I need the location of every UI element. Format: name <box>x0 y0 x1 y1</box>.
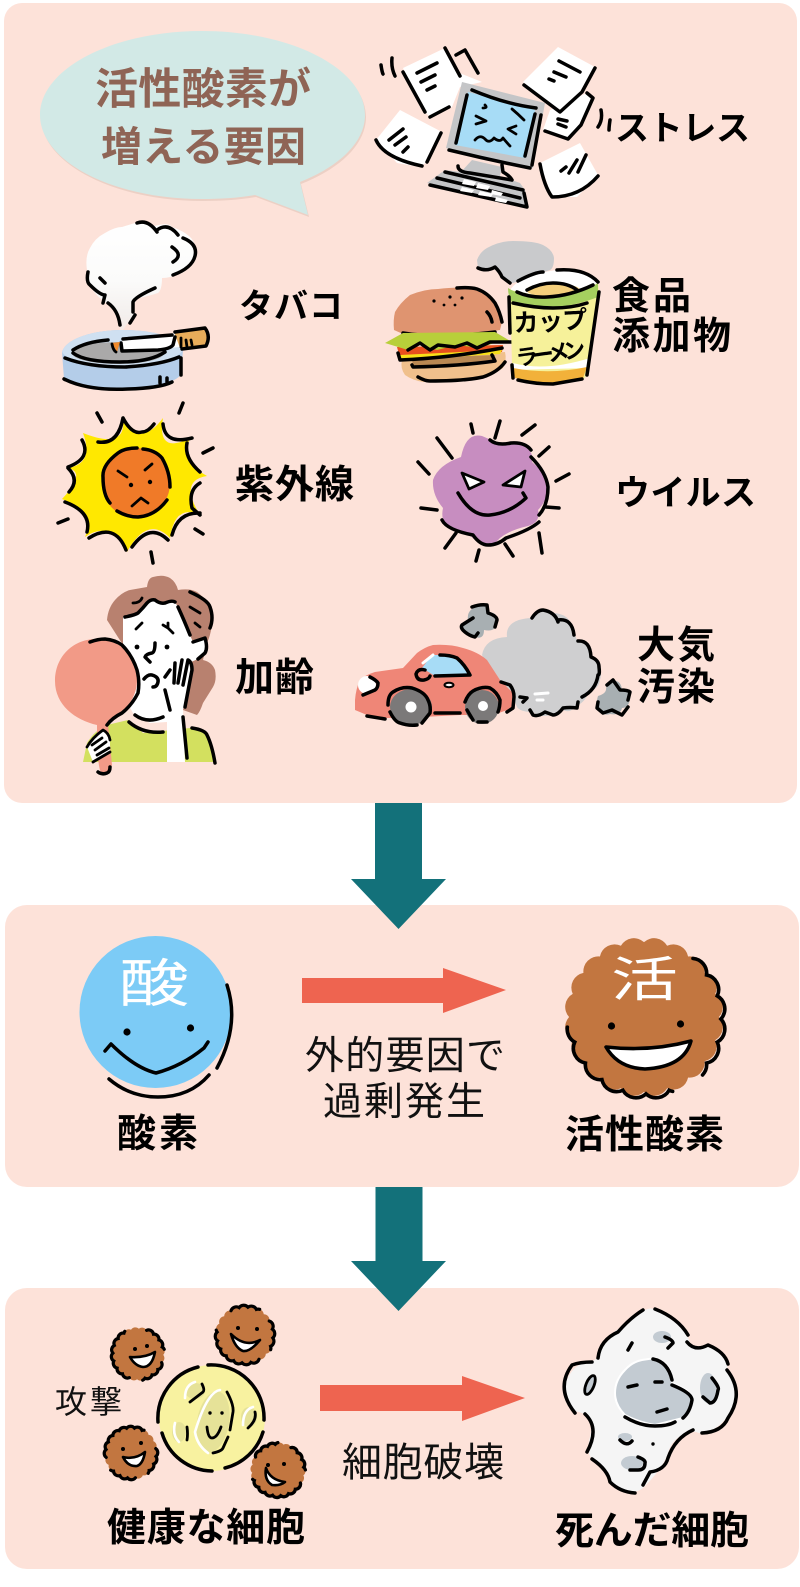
icon: reactive oxygen: 活 <box>611 954 678 1007</box>
icon: small reactive oxygen bottom right <box>241 1433 315 1507</box>
panel: cell destruction <box>5 1288 799 1569</box>
icon: dead cell <box>564 1308 737 1493</box>
label: food additives: 添加物 <box>612 316 731 358</box>
icon: oxygen smiling ball: 酸 <box>119 956 189 1014</box>
arrow: causes to radicals <box>351 803 446 929</box>
panel: causes <box>4 3 797 803</box>
icon: hamburger and cup noodles: カップ <box>513 306 588 338</box>
icon: small reactive oxygen top left <box>104 1320 172 1388</box>
label: air pollution: 汚染 <box>637 667 715 709</box>
text: generated by external factors <box>305 1035 505 1124</box>
speech bubble heading: 増える要因 <box>101 124 306 170</box>
label: reactive oxygen: 活性酸素 <box>565 1114 724 1157</box>
label: food additives <box>612 276 731 358</box>
arrow: excess generation <box>302 968 506 1013</box>
arrow: cell destruction <box>320 1376 525 1421</box>
label: air pollution: 大気 <box>637 625 715 667</box>
text: generated by external factors: 外的要因で <box>305 1035 505 1078</box>
label: cell destruction: 細胞破壊 <box>342 1441 504 1485</box>
icon: small reactive oxygen top right <box>205 1295 285 1375</box>
icon: hamburger and cup noodles: ラーメン <box>514 336 587 371</box>
label: tobacco: タバコ <box>239 288 343 326</box>
label: oxygen: 酸素 <box>117 1113 198 1156</box>
icon: reactive oxygen <box>565 938 725 1098</box>
label: food additives: 食品 <box>612 276 691 318</box>
panel: oxygen becomes reactive oxygen <box>5 905 799 1187</box>
label: ultraviolet: 紫外線 <box>235 464 354 507</box>
icon: cigarette in ashtray <box>62 222 209 390</box>
icon: older woman with mirror <box>55 576 216 774</box>
icon: car with exhaust <box>355 605 630 725</box>
label: dead cell: 死んだ細胞 <box>555 1510 749 1553</box>
icon: hamburger and cup noodles <box>385 241 599 385</box>
label: virus: ウイルス <box>615 474 756 513</box>
label: air pollution <box>637 625 715 709</box>
icon: virus <box>418 421 569 561</box>
label: healthy cell: 健康な細胞 <box>107 1507 305 1550</box>
icon: stressed computer with papers <box>376 47 610 207</box>
icon: angry sun <box>58 403 213 563</box>
icon: healthy cell under attack <box>158 1365 265 1471</box>
speech bubble heading <box>40 31 366 217</box>
label: attack: 攻撃 <box>55 1384 122 1420</box>
label: aging: 加齢 <box>235 657 314 700</box>
icon: small reactive oxygen bottom left <box>100 1422 162 1484</box>
icon: oxygen smiling ball <box>80 936 232 1097</box>
arrow: radicals attack cells <box>351 1187 446 1311</box>
speech bubble heading: 活性酸素が <box>95 66 311 114</box>
label: stress: ストレス <box>615 110 750 148</box>
text: generated by external factors: 過剰発生 <box>323 1081 485 1124</box>
